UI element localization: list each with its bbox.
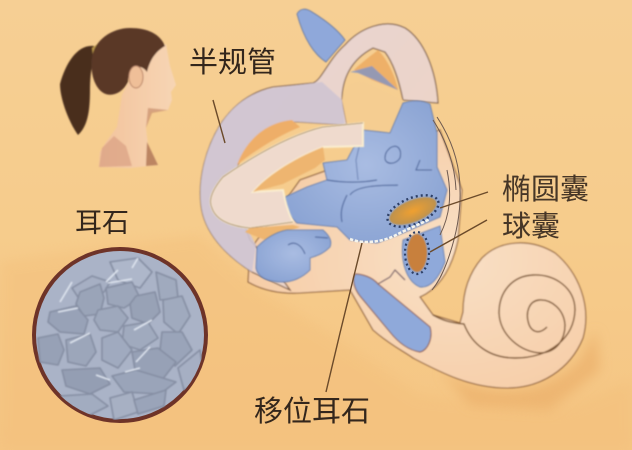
utricle macula [383, 189, 443, 233]
lateral semicircular canal (lavender) and superior arch [200, 24, 438, 290]
label: 椭圆囊 with leader: 椭圆囊 [502, 173, 589, 206]
label: 移位耳石 with leader: 移位耳石 [254, 395, 370, 428]
inner openings [237, 120, 300, 165]
saccule, blue sac [402, 226, 445, 287]
vestibule, blue membranous labyrinth [285, 101, 447, 243]
neck and shoulders [99, 44, 176, 168]
ampulla, lower left blue sac [256, 230, 331, 282]
otolith magnified circle [34, 249, 206, 421]
hair [91, 28, 165, 95]
figure: woman's head in profile with ponytail [60, 28, 176, 168]
label: 移位耳石 with leader [254, 243, 370, 428]
displaced otoliths, white dashed strip [350, 219, 430, 242]
horizontal canal (cream tube) [210, 123, 363, 240]
blue duct upper left [297, 9, 345, 62]
label: 半规管 with leader [189, 46, 276, 143]
crystal highlights [58, 258, 152, 380]
ear [129, 66, 143, 88]
saccule macula [405, 232, 429, 274]
label: 球囊 with leader [430, 210, 560, 252]
label: 耳石: 耳石 [75, 208, 129, 238]
label: 半规管 with leader: 半规管 [189, 46, 276, 79]
label: 椭圆囊 with leader [440, 173, 589, 208]
long blue duct bottom [354, 270, 431, 352]
nerve lines on right [432, 117, 460, 290]
ponytail [60, 46, 96, 135]
cochlea and peach membrane [248, 130, 586, 388]
cochlea spiral [433, 275, 575, 358]
label: 球囊 with leader: 球囊 [502, 210, 560, 243]
otolith crystals [38, 258, 204, 420]
